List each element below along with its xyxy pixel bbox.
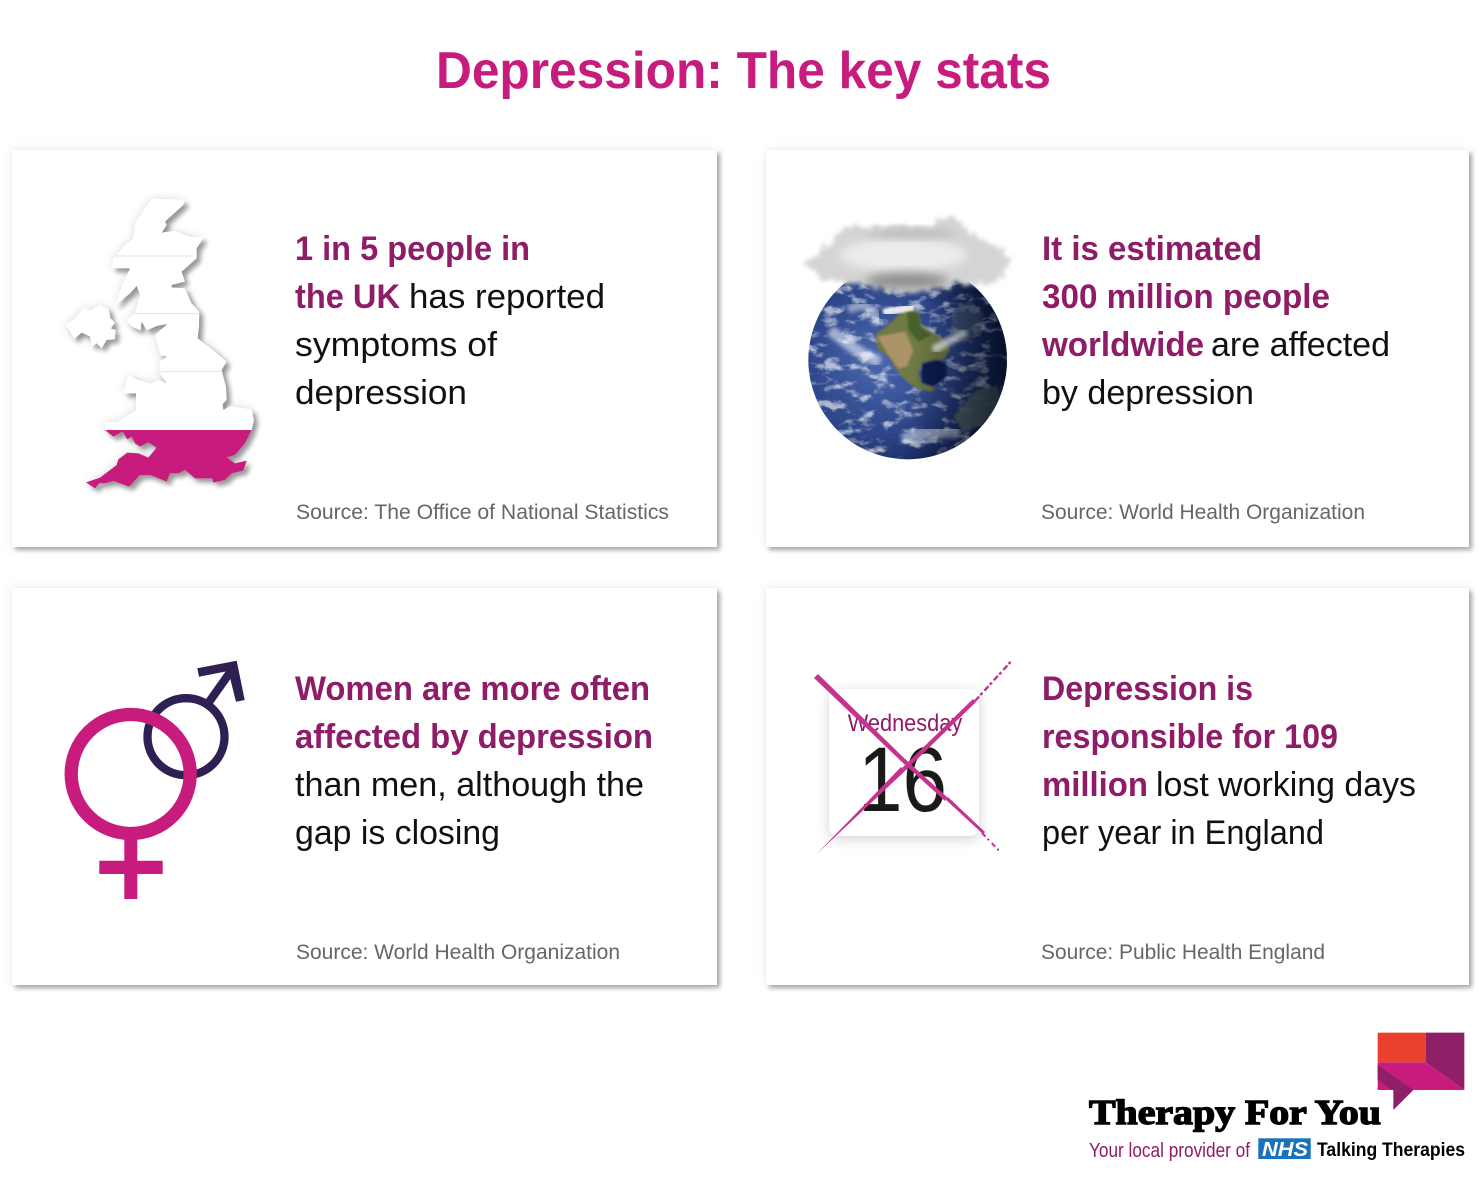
statistic text <box>295 230 605 412</box>
icon: earth beneath a grey cloud <box>805 216 1012 460</box>
source: Source: World Health Organization <box>296 941 620 964</box>
statistic text: affected by depression <box>295 718 653 756</box>
cloud <box>805 216 1012 292</box>
source: Source: World Health Organization <box>1041 501 1365 524</box>
statistic text: gap is closing <box>295 814 500 852</box>
statistic text <box>1042 670 1416 852</box>
icon: crossed-out calendar page <box>814 661 1012 854</box>
statistic text: It is estimated <box>1042 230 1262 268</box>
panel: worldwide statistic <box>766 150 1469 547</box>
statistic text: worldwide <box>1041 326 1204 364</box>
statistic text: than men, although the <box>295 766 644 804</box>
statistic text: 1 in 5 people in <box>295 230 530 268</box>
source: Source: The Office of National Statistics <box>296 501 669 524</box>
statistic text <box>1041 230 1390 412</box>
statistic text: million <box>1042 766 1148 804</box>
statistic text: symptoms of <box>295 326 498 364</box>
source: Source: Public Health England <box>1041 941 1325 964</box>
statistic text: depression <box>295 374 467 412</box>
icon: UK map with southern fifth highlighted <box>66 198 258 492</box>
icon: speech bubble <box>1378 1033 1464 1110</box>
panel: lost working days statistic <box>766 588 1469 985</box>
panel: UK statistic <box>12 150 717 547</box>
wordmark: Therapy For You <box>1089 1093 1381 1132</box>
tagline: Your local provider of <box>1089 1140 1250 1162</box>
statistic text: Depression is <box>1042 670 1253 708</box>
panel: gender statistic <box>12 588 717 985</box>
icon: crossed-out calendar page: 16 <box>858 729 947 831</box>
statistic text: the UK <box>295 278 400 316</box>
statistic text: by depression <box>1042 374 1254 412</box>
icon: male and female symbols <box>71 661 245 899</box>
service name: Talking Therapies <box>1317 1140 1465 1161</box>
statistic text: per year in England <box>1042 814 1324 852</box>
statistic text: has reported <box>409 278 605 316</box>
statistic text: Women are more often <box>295 670 650 708</box>
NHS badge: NHS <box>1262 1139 1309 1161</box>
title: Depression: The key stats <box>436 42 1051 100</box>
statistic text: responsible for 109 <box>1042 718 1338 756</box>
icon: crossed-out calendar page: Wednesday <box>848 710 962 737</box>
statistic text: are affected <box>1211 326 1390 364</box>
statistic text: lost working days <box>1156 766 1416 804</box>
statistic text: 300 million people <box>1042 278 1330 316</box>
statistic text <box>295 670 653 852</box>
logo: Therapy For You <box>1089 1033 1465 1162</box>
